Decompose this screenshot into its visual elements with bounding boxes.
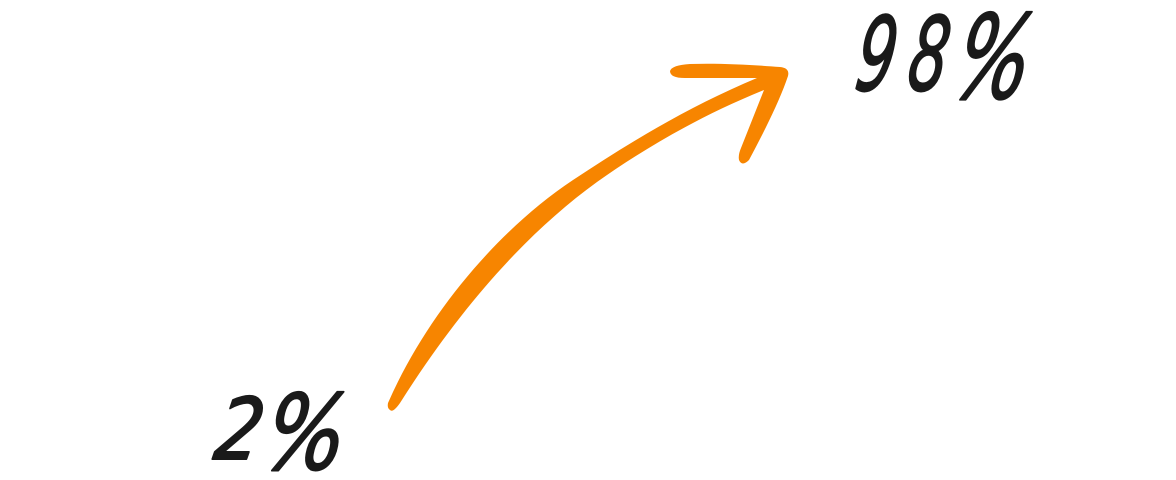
- start value: 2%: [208, 373, 358, 480]
- start value: 2%: 2: [208, 380, 272, 479]
- end value: 98%: [850, 0, 1047, 126]
- arrow: rising curve from 2% to 98%: [388, 64, 788, 411]
